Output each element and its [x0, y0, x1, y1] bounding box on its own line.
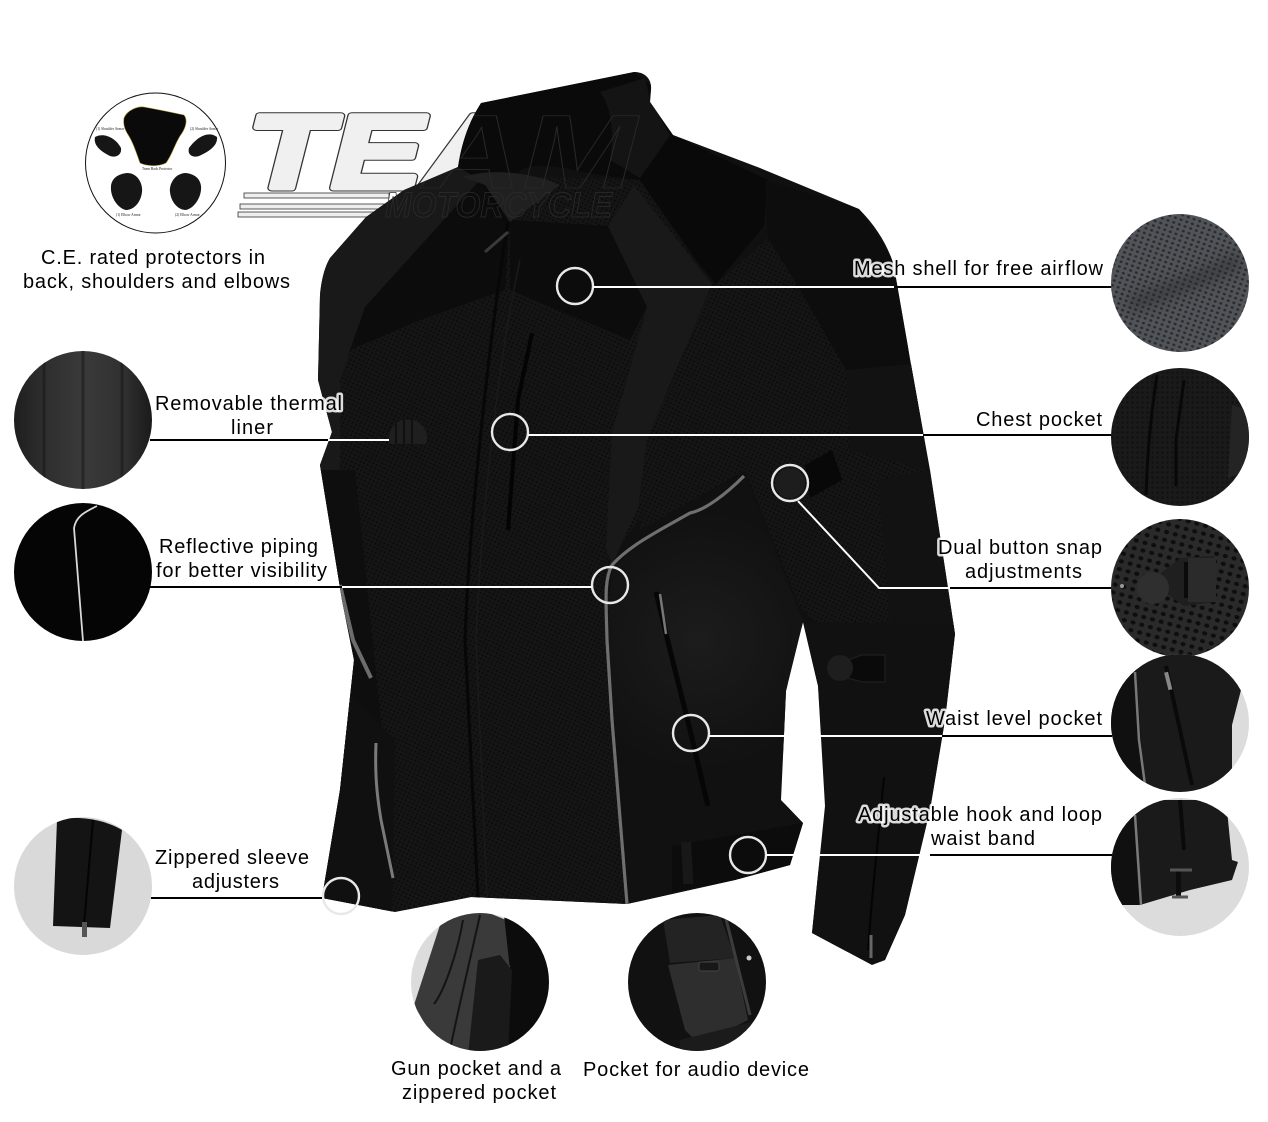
label: button snap: Dual button snap — [938, 537, 1102, 559]
torso mesh — [320, 388, 625, 910]
waist band — [731, 824, 803, 881]
armor captions: (2) Elbow Armor — [175, 213, 201, 217]
label: reflective piping: for better visibility — [156, 560, 327, 582]
label: button snap: adjustments — [965, 561, 1082, 583]
detail: reflective piping — [14, 503, 152, 641]
label: protectors — [23, 247, 290, 293]
label: thermal liner: liner — [231, 417, 273, 439]
detail: gun pocket — [411, 905, 550, 1055]
shoulder patch — [856, 208, 909, 352]
armor captions: (1) Shoulder Armor — [96, 127, 125, 131]
shoulder and elbow armor — [95, 134, 217, 210]
label: mesh shell: Mesh shell for free airflow — [854, 258, 1104, 280]
logo overlay on jacket — [385, 116, 640, 218]
waist panel right of piping — [608, 594, 803, 904]
detail: button snap — [1111, 519, 1249, 657]
armor captions: Team Back Protector — [142, 167, 173, 171]
arm mesh — [911, 364, 955, 633]
label: gun pocket: Gun pocket and a — [391, 1058, 562, 1080]
lower sleeve — [800, 622, 955, 970]
label: protectors: back, shoulders and elbows — [23, 271, 290, 293]
back protector — [124, 107, 186, 166]
protector diagram — [86, 93, 226, 233]
side mesh panel — [640, 238, 768, 530]
jacket — [312, 72, 955, 970]
sleeve zipper — [868, 777, 884, 950]
armor captions — [96, 127, 219, 217]
label: gun pocket: zippered pocket — [402, 1082, 556, 1104]
logo: TEAM Motorcycle: TEAM — [247, 94, 640, 211]
label: sleeve adjusters: Zippered sleeve — [155, 847, 309, 869]
upper arm snap — [805, 450, 842, 498]
side reflective piping — [376, 743, 393, 878]
leader lines — [150, 287, 1112, 898]
front reflective piping — [606, 476, 744, 904]
logo overlay on jacket: MOTORCYCLE — [385, 186, 614, 225]
logo: TEAM Motorcycle: TEAM — [247, 94, 640, 211]
left side soft shading — [320, 470, 354, 888]
chest stripe — [606, 186, 712, 565]
detail: mesh shell — [1111, 214, 1249, 352]
callout circles on jacket — [323, 268, 808, 914]
label: waist band: waist band — [930, 828, 1035, 850]
label: button snap — [938, 537, 1102, 583]
label: reflective piping: Reflective piping — [159, 536, 318, 558]
label: waist band: Adjustable hook and loop — [858, 804, 1102, 826]
label: sleeve adjusters: adjusters — [192, 871, 279, 893]
label: chest pocket: Chest pocket — [976, 409, 1102, 431]
collar zipper pull — [485, 232, 508, 252]
label: sleeve adjusters — [155, 847, 309, 893]
liner peek — [388, 420, 428, 444]
collar — [458, 72, 673, 195]
label: waist band — [858, 804, 1102, 850]
label: thermal liner: Removable thermal — [155, 393, 342, 415]
upper chest dark panel — [350, 180, 510, 350]
label: waist pocket: Waist level pocket — [926, 708, 1102, 730]
armor captions: (1) Elbow Armor — [116, 213, 142, 217]
detail: thermal liner — [14, 351, 152, 489]
left shoulder panel — [312, 165, 480, 470]
chest pocket zipper — [508, 333, 532, 530]
forearm snap — [848, 655, 885, 682]
armor captions: (2) Shoulder Armor — [190, 127, 219, 131]
detail: chest pocket — [1111, 368, 1249, 506]
label: audio pocket: Pocket for audio device — [583, 1059, 809, 1081]
logo overlay on jacket: TEAM — [247, 94, 640, 211]
detail: waist pocket — [1111, 654, 1249, 792]
label: protectors: C.E. rated protectors in — [41, 247, 265, 269]
shoulder dark band — [673, 135, 676, 136]
detail: audio pocket — [628, 913, 770, 1051]
label: gun pocket — [391, 1058, 562, 1104]
label: thermal liner — [155, 393, 342, 439]
waist pocket zipper — [656, 592, 708, 806]
detail: waist band — [1100, 798, 1249, 936]
label: reflective piping — [156, 536, 327, 582]
main zipper — [464, 292, 499, 898]
detail: sleeve zipper — [14, 817, 152, 955]
